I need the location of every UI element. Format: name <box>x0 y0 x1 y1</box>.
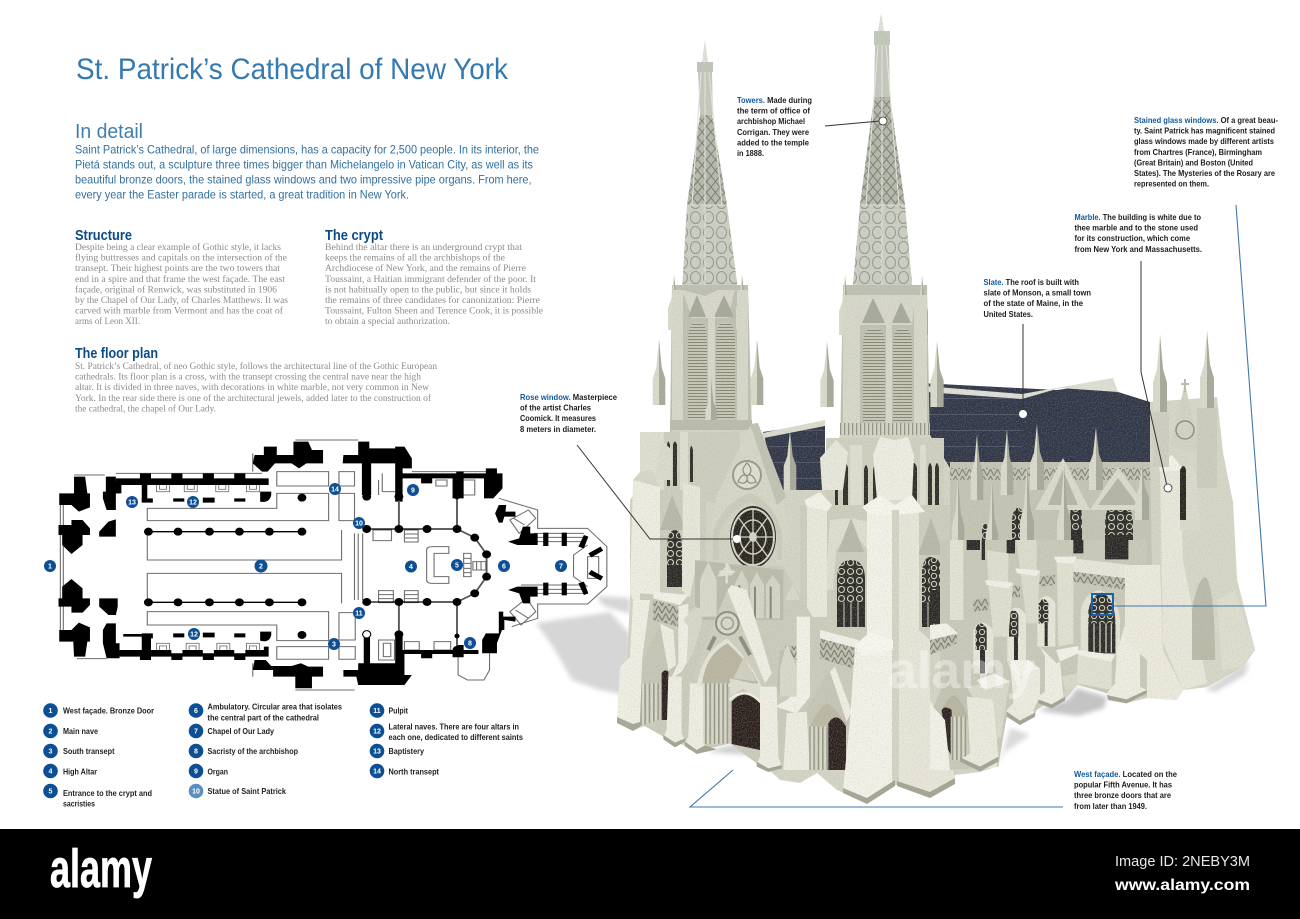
legend <box>43 702 523 808</box>
text block: The crypt: Behind the altar there is an underground crypt that <box>325 242 522 253</box>
callout: slate: of the state of Maine, in the <box>984 298 1083 308</box>
floor plan number markers: 12 <box>190 632 198 638</box>
wall plinths <box>1056 646 1115 690</box>
legend: 11 <box>373 708 381 715</box>
floor plan number markers: 2 <box>259 564 263 570</box>
callout: marble <box>1074 212 1202 492</box>
legend: Main nave <box>63 726 98 736</box>
legend: 14 <box>373 768 381 776</box>
callout: rose window: 8 meters in diameter. <box>520 424 596 434</box>
floor plan number markers: 12 <box>189 500 197 506</box>
callout: west facade <box>690 769 1177 811</box>
callout: marble: for its construction, which come <box>1074 233 1190 243</box>
text block: The crypt: keeps the remains of all the archbishops of the <box>325 253 505 264</box>
callout: towers: Towers. Made during <box>737 95 812 105</box>
text block: Structure <box>75 227 288 327</box>
text block: The crypt: Archdiocese of New York, and the remains of Pierre <box>325 263 526 274</box>
callout: stained glass windows: from Chartres (France), Birmingham <box>1134 147 1262 157</box>
legend: 6 <box>194 708 198 715</box>
floor plan number markers <box>44 483 567 650</box>
text block: The floor plan: The floor plan <box>75 345 158 362</box>
lower windows <box>930 540 1128 673</box>
central gable with trefoil <box>710 423 790 570</box>
callout: rose window: Coomick. It measures <box>520 413 596 423</box>
text block: Structure: Structure <box>75 227 132 244</box>
title: St. Patrick’s Cathedral of New York <box>76 53 509 86</box>
legend: sacristies <box>63 798 95 808</box>
floor plan number markers: 9 <box>411 488 415 494</box>
text block: The floor plan <box>75 345 437 414</box>
rose window <box>730 506 776 568</box>
left portal <box>640 600 678 726</box>
text block: In detail: Saint Patrick’s Cathedral, of large dimensions, has a capacity for 2,500 people. In its interior, the <box>75 142 539 156</box>
text block: In detail: Pietá stands out, a sculpture three times bigger than Michelangelo in Vatican City, as well as its <box>75 158 533 172</box>
faint watermark: alamy <box>888 642 1036 700</box>
banner: stock photo footer: Image ID: 2NEBY3M <box>1115 853 1250 870</box>
text block: The crypt: The crypt <box>325 227 383 244</box>
callout: towers <box>737 95 887 158</box>
legend: 5 <box>49 788 53 796</box>
legend: 4 <box>49 768 53 776</box>
roof: nave and transept slate <box>758 378 1150 492</box>
friezes <box>930 558 1130 655</box>
row of gablets below the rose window <box>695 560 800 623</box>
legend: Chapel of Our Lady <box>208 726 274 736</box>
legend: Pulpit <box>388 706 408 716</box>
legend: South transept <box>63 746 115 756</box>
callout: slate: slate of Monson, a small town <box>984 288 1091 298</box>
text block: The floor plan: altar. It is divided in three naves, with decorations in white marble, not very common in New <box>75 382 429 393</box>
facade upper storey with lancet windows <box>640 430 944 518</box>
text block: The crypt: Toussaint, Fulton Sheen and Terence Cook, it is possible <box>325 306 543 317</box>
legend: Lateral naves. There are four altars in <box>388 722 519 732</box>
callout: marble: from New York and Massachusetts. <box>1074 244 1202 254</box>
callout: stained glass windows: States). The Mysteries of the Rosary are <box>1134 168 1275 178</box>
legend: 7 <box>194 728 198 736</box>
legend: Ambulatory. Circular area that isolates <box>208 702 342 712</box>
transept buttress in front of the side nave <box>1125 565 1183 700</box>
legend: 1 <box>49 708 53 715</box>
callout: marble: Marble. The building is white due to <box>1074 212 1201 222</box>
legend: Entrance to the crypt and <box>63 788 152 798</box>
banner: stock photo footer: alamy <box>50 839 152 899</box>
lower facade: portals and buttresses <box>640 560 860 772</box>
legend: 2 <box>49 728 53 736</box>
callout: rose window <box>520 392 741 543</box>
right tower spire and belfry <box>820 13 944 450</box>
text block: The crypt: is not habitually open to the public, but since it holds <box>325 284 531 295</box>
callout: slate: Slate. The roof is built with <box>984 277 1079 287</box>
callout: rose window: Rose window. Masterpiece <box>520 392 617 402</box>
floor plan number markers: 7 <box>559 564 563 570</box>
text block: Structure: by the Chapel of Our Lady, of Charles Matthews. It was <box>75 295 288 306</box>
legend: the central part of the cathedral <box>208 712 319 722</box>
text block: The floor plan: York. In the rear side there is one of the architectural jewels, added later to the construction of <box>75 393 432 404</box>
legend: West façade. Bronze Door <box>63 706 155 716</box>
legend: 13 <box>373 748 381 756</box>
legend: Organ <box>208 766 228 776</box>
legend: each one, dedicated to different saints <box>388 732 523 742</box>
callout: stained glass windows: (Great Britain) and Boston (United <box>1134 157 1253 167</box>
text block: In detail <box>75 121 539 202</box>
cathedral illustration <box>617 13 1255 804</box>
facade windows <box>630 470 950 640</box>
legend: 3 <box>49 748 53 756</box>
callout: west facade: three bronze doors that are <box>1074 790 1171 800</box>
callout: towers: added to the temple <box>737 137 809 147</box>
text block: In detail: every year the Easter parade is started, a great tradition in New York. <box>75 188 409 202</box>
legend: North transept <box>388 766 439 776</box>
callout: slate: United States. <box>984 309 1033 319</box>
text block: In detail: beautiful bronze doors, the stained glass windows and two impressive pipe organs. From here, <box>75 172 532 186</box>
callout: slate <box>984 277 1091 418</box>
floor plan number markers: 10 <box>355 520 363 528</box>
callout: stained glass windows: represented on them. <box>1134 179 1209 189</box>
text block: The crypt: Toussaint, a Haitian immigrant defender of the poor. It <box>325 274 536 285</box>
callout: towers: archbishop Michael <box>737 116 805 126</box>
callout: towers: Corrigan. They were <box>737 127 809 137</box>
legend: Sacristy of the archbishop <box>208 746 298 756</box>
callout: west facade: from later than 1949. <box>1074 801 1147 811</box>
floor plan number markers: 8 <box>468 640 472 648</box>
callout: rose window: of the artist Charles <box>520 403 591 413</box>
legend: Baptistery <box>388 746 424 756</box>
floor plan number markers: 11 <box>355 610 363 618</box>
callout: stained glass windows: ty. Saint Patrick has magnificent stained <box>1134 126 1275 136</box>
legend: 9 <box>194 768 198 776</box>
text block: Structure: Despite being a clear example of Gothic style, it lacks <box>75 242 281 253</box>
text block: The floor plan: the cathedral, the chapel of Our Lady. <box>75 403 216 414</box>
floor plan number markers: 1 <box>48 564 52 570</box>
piers between windows <box>950 540 1147 647</box>
text block: Structure: end in a spire and that frame the west façade. The east <box>75 274 285 285</box>
floor plan number markers: 5 <box>455 562 459 570</box>
side nave clerestory <box>950 424 1152 600</box>
central corner buttress <box>843 495 955 804</box>
floor plan number markers: 13 <box>128 500 136 506</box>
text block: Structure: façade, original of Renwick, was substituted in 1906 <box>75 284 277 295</box>
text block: The crypt: to obtain a special authorization. <box>325 316 450 327</box>
text block: The floor plan: cathedrals. Its floor plan is a cross, with the transept crossing the central nave near the high <box>75 372 421 383</box>
main stone body <box>617 397 1255 803</box>
text block: In detail: In detail <box>75 121 143 143</box>
text block: Structure: flying buttresses and capitals on the intersection of the <box>75 253 287 264</box>
south transept front <box>1153 330 1255 690</box>
floor plan <box>58 440 607 690</box>
callout: west facade: West façade. Located on the <box>1074 769 1177 779</box>
callout: marble: thee marble and to the stone used <box>1074 223 1198 233</box>
banner: stock photo footer: www.alamy.com <box>1114 877 1250 894</box>
shadow of the cathedral on the ground <box>536 596 1250 768</box>
callout: stained glass windows: glass windows made by different artists <box>1134 136 1274 146</box>
floor plan number markers: 3 <box>332 642 336 648</box>
right piers and portal <box>757 600 858 772</box>
text block: Structure: carved with marble from Vermont and has the coat of <box>75 306 284 317</box>
callout: stained glass windows <box>1092 115 1278 615</box>
text block: Structure: transept. Their highest points are the two towers that <box>75 263 280 274</box>
legend: 10 <box>192 788 200 796</box>
legend: Statue of Saint Patrick <box>208 786 286 796</box>
legend: 12 <box>373 728 381 736</box>
far left corner buttress base <box>617 600 650 731</box>
text block: The crypt: the remains of three candidates for canonization: Pierre <box>325 295 540 306</box>
callout: towers: the term of office of <box>737 106 810 116</box>
callout: towers: in 1888. <box>737 148 764 158</box>
banner: stock photo footer <box>0 829 1300 919</box>
left tower spire and belfry <box>653 40 763 435</box>
side nave lower storey with buttresses <box>930 540 1147 771</box>
text block: Structure: arms of Leon XII. <box>75 316 140 327</box>
floor plan number markers: 4 <box>409 564 413 571</box>
floor plan number markers: 14 <box>331 486 339 494</box>
callout: stained glass windows: Stained glass windows. Of a great beau- <box>1134 115 1278 125</box>
floor plan number markers: 6 <box>502 564 506 570</box>
buttresses <box>930 607 1147 771</box>
main portal gable <box>693 585 772 750</box>
text block: The crypt <box>325 227 543 327</box>
left piers <box>653 592 717 754</box>
text block: The floor plan: St. Patrick’s Cathedral, of neo Gothic style, follows the architectural line of the Gothic European <box>75 361 437 372</box>
legend: 8 <box>194 748 198 756</box>
legend: High Altar <box>63 766 98 776</box>
callout: west facade: popular Fifth Avenue. It has <box>1074 780 1172 790</box>
